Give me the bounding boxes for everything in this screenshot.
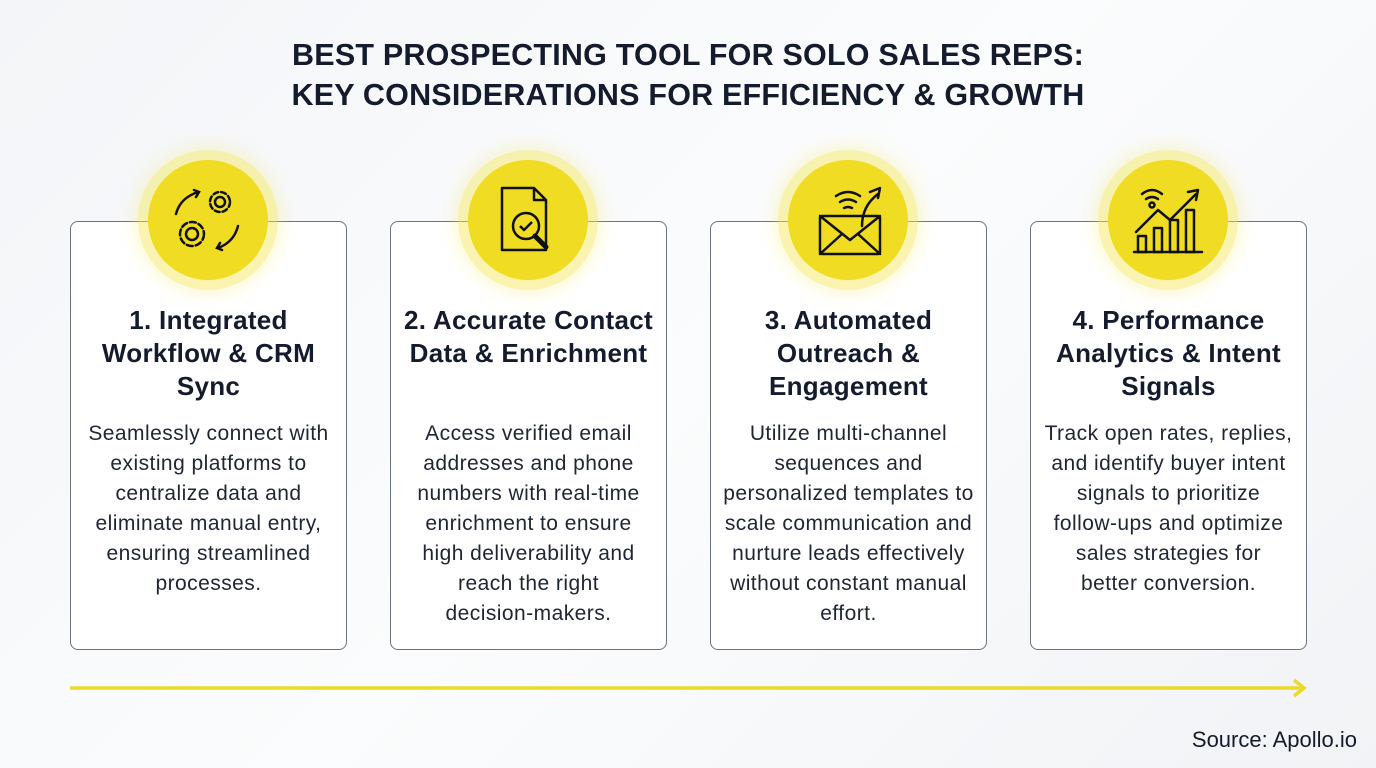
panel: card 2 [390, 221, 667, 650]
panel: card 2: enrichment to ensure [425, 512, 632, 535]
source: Source: Apollo.io [1192, 727, 1357, 752]
panel: card 4 [1030, 221, 1307, 650]
panel: card 1: ensuring streamlined [107, 542, 310, 565]
panel: card 3: Utilize multi-channel [750, 422, 947, 445]
panel: card 1: 1. Integrated [129, 305, 288, 335]
panel: card 3: Outreach & [777, 338, 920, 368]
panel: card 1: centralize data and [115, 482, 302, 505]
panel: card 3 [710, 221, 987, 650]
panel: card 1: eliminate manual entry, [96, 512, 321, 535]
title: KEY CONSIDERATIONS FOR EFFICIENCY & GROWTH [292, 78, 1084, 112]
panel: card 2: high deliverability and [422, 542, 635, 565]
icon: email outreach [778, 150, 918, 290]
panel: card 2: reach the right [458, 572, 599, 595]
panel: card 1 [70, 221, 347, 650]
panel: card 1: Sync [177, 371, 240, 401]
icon: analytics chart [1098, 150, 1238, 290]
panel: card 1: processes. [155, 572, 262, 595]
panel: card 1: existing platforms to [110, 452, 307, 475]
panel: card 4: Track open rates, replies, [1045, 422, 1292, 445]
panel: card 2: decision-makers. [446, 602, 611, 625]
title: BEST PROSPECTING TOOL FOR SOLO SALES REPS: [292, 38, 1084, 72]
panel: card 3: 3. Automated [765, 305, 932, 335]
panel: card 2: Data & Enrichment [410, 338, 647, 368]
icon: gears [138, 150, 278, 290]
panel: card 4: 4. Performance [1072, 305, 1265, 335]
icon: document search [458, 150, 598, 290]
panel: card 2: numbers with real-time [417, 482, 640, 505]
panel: card 3: without constant manual [730, 572, 967, 595]
panel: card 2: addresses and phone [423, 452, 634, 475]
panel: card 3: scale communication and [725, 512, 972, 535]
panel: card 3: personalized templates to [723, 482, 974, 505]
panel: card 4: sales strategies for [1076, 542, 1261, 565]
panel: card 4: follow-ups and optimize [1054, 512, 1283, 535]
panel: card 2: Access verified email [425, 422, 632, 445]
panel: card 3: Engagement [769, 371, 928, 401]
panel: card 4: better conversion. [1081, 572, 1256, 595]
panel: card 4: and identify buyer intent [1051, 452, 1286, 475]
title [292, 38, 1084, 112]
panel: card 3: effort. [820, 602, 877, 625]
arrow: timeline [70, 678, 1307, 698]
panel: card 2: 2. Accurate Contact [404, 305, 653, 335]
panel: card 4: signals to prioritize [1077, 482, 1260, 505]
panel: card 1: Seamlessly connect with [88, 422, 329, 445]
panel: card 4: Signals [1121, 371, 1216, 401]
panel: card 3: sequences and [774, 452, 923, 475]
panel: card 1: Workflow & CRM [102, 338, 315, 368]
panel: card 4: Analytics & Intent [1056, 338, 1281, 368]
panel: card 3: nurture leads effectively [732, 542, 965, 565]
